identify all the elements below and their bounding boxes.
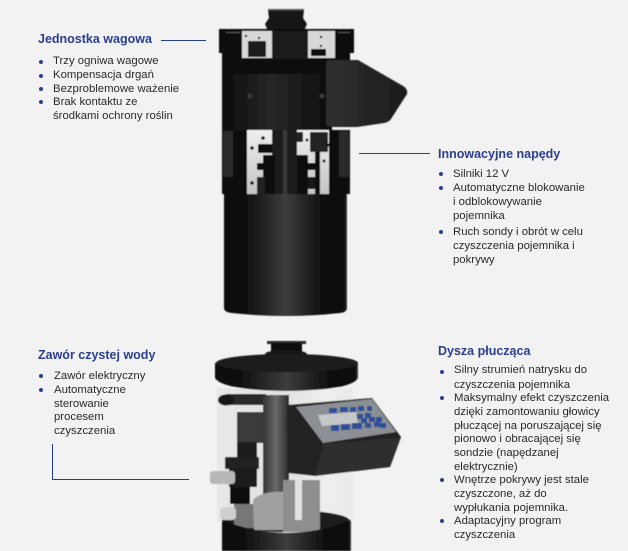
- bullet list: [440, 364, 610, 541]
- bullet list: czyszczone, aż do: [454, 488, 547, 500]
- base back rim: [222, 510, 350, 532]
- bullet list: Silniki 12 V: [453, 168, 509, 180]
- bottom device: rinse nozzle unit: [210, 341, 401, 551]
- top neck: [265, 9, 307, 31]
- bullet list: Kompensacja drgań: [53, 69, 154, 81]
- bullet list: sondzie (napędzanej: [454, 447, 559, 459]
- bullet list: Ruch sondy i obrót w celu: [453, 226, 583, 238]
- panel: Dysza płucząca: [438, 344, 610, 541]
- left connectors: [210, 471, 235, 484]
- bullet list: Wnętrze pokrywy jest stale: [454, 474, 589, 486]
- bullet list: płuczącej na poruszającej się: [454, 420, 602, 432]
- lower cylinder: [224, 194, 347, 316]
- panel: Innowacyjne napędy: [438, 147, 585, 266]
- lid knob: [265, 341, 307, 358]
- bullet list: Maksymalny efekt czyszczenia: [454, 392, 609, 404]
- bullet list: i odblokowywanie: [453, 196, 542, 208]
- bullet list: sterowanie: [54, 398, 109, 410]
- bullet list: [439, 168, 585, 266]
- glass cylinder: [217, 388, 353, 522]
- panel: Zawór czystej wody: [38, 348, 156, 437]
- bullet list: Trzy ogniwa wagowe: [53, 55, 158, 67]
- panel: Jednostka wagowa: [38, 32, 179, 122]
- callout line: Innowacyjne napędy: [359, 153, 430, 154]
- keypad: [329, 406, 386, 431]
- bullet list: dzięki zamontowaniu głowicy: [454, 406, 600, 418]
- control box: [287, 398, 401, 476]
- bullet list: czyszczenia pojemnika i: [453, 240, 575, 252]
- bullet list: wypłukania pojemnika.: [454, 502, 568, 514]
- base: [222, 520, 351, 551]
- bullet list: pokrywy: [453, 254, 495, 266]
- bullet list: Automatyczne: [54, 384, 126, 396]
- bullet list: [39, 370, 146, 437]
- callout line: Jednostka wagowa: [161, 40, 206, 41]
- side housing: [326, 60, 407, 127]
- bullet list: czyszczenia pojemnika: [454, 379, 570, 391]
- bullet list: Brak kontaktu ze: [53, 96, 138, 108]
- bullet list: środkami ochrony roślin: [53, 110, 173, 122]
- heading: Innowacyjne napędy: [438, 147, 560, 161]
- middle cutaway section: [222, 130, 350, 194]
- bullet list: elektrycznie): [454, 461, 518, 473]
- bullet list: Adaptacyjny program: [454, 515, 561, 527]
- heading: Jednostka wagowa: [38, 32, 152, 46]
- bullet list: Automatyczne blokowanie: [453, 182, 585, 194]
- bullet list: Zawór elektryczny: [54, 370, 145, 382]
- bullet list: pionowo i obracającej się: [454, 433, 581, 445]
- lid: [215, 354, 358, 391]
- bullet list: pojemnika: [453, 210, 505, 222]
- heading: Dysza płucząca: [438, 344, 530, 358]
- bullet list: Bezproblemowe ważenie: [53, 83, 179, 95]
- top device: weighing unit cutaway: [219, 9, 407, 316]
- bullet list: czyszczenia: [454, 529, 515, 541]
- bullet list: Silny strumień natrysku do: [454, 364, 587, 376]
- bullet list: [39, 55, 179, 122]
- heading: Zawór czystej wody: [38, 348, 155, 362]
- bullet list: czyszczenia: [54, 425, 115, 437]
- internal mechanism: [210, 394, 320, 532]
- callout line: Zawór czystej wody: [52, 444, 189, 480]
- central black band: [222, 60, 332, 130]
- top flange: [219, 29, 354, 61]
- bullet list: procesem: [54, 411, 104, 423]
